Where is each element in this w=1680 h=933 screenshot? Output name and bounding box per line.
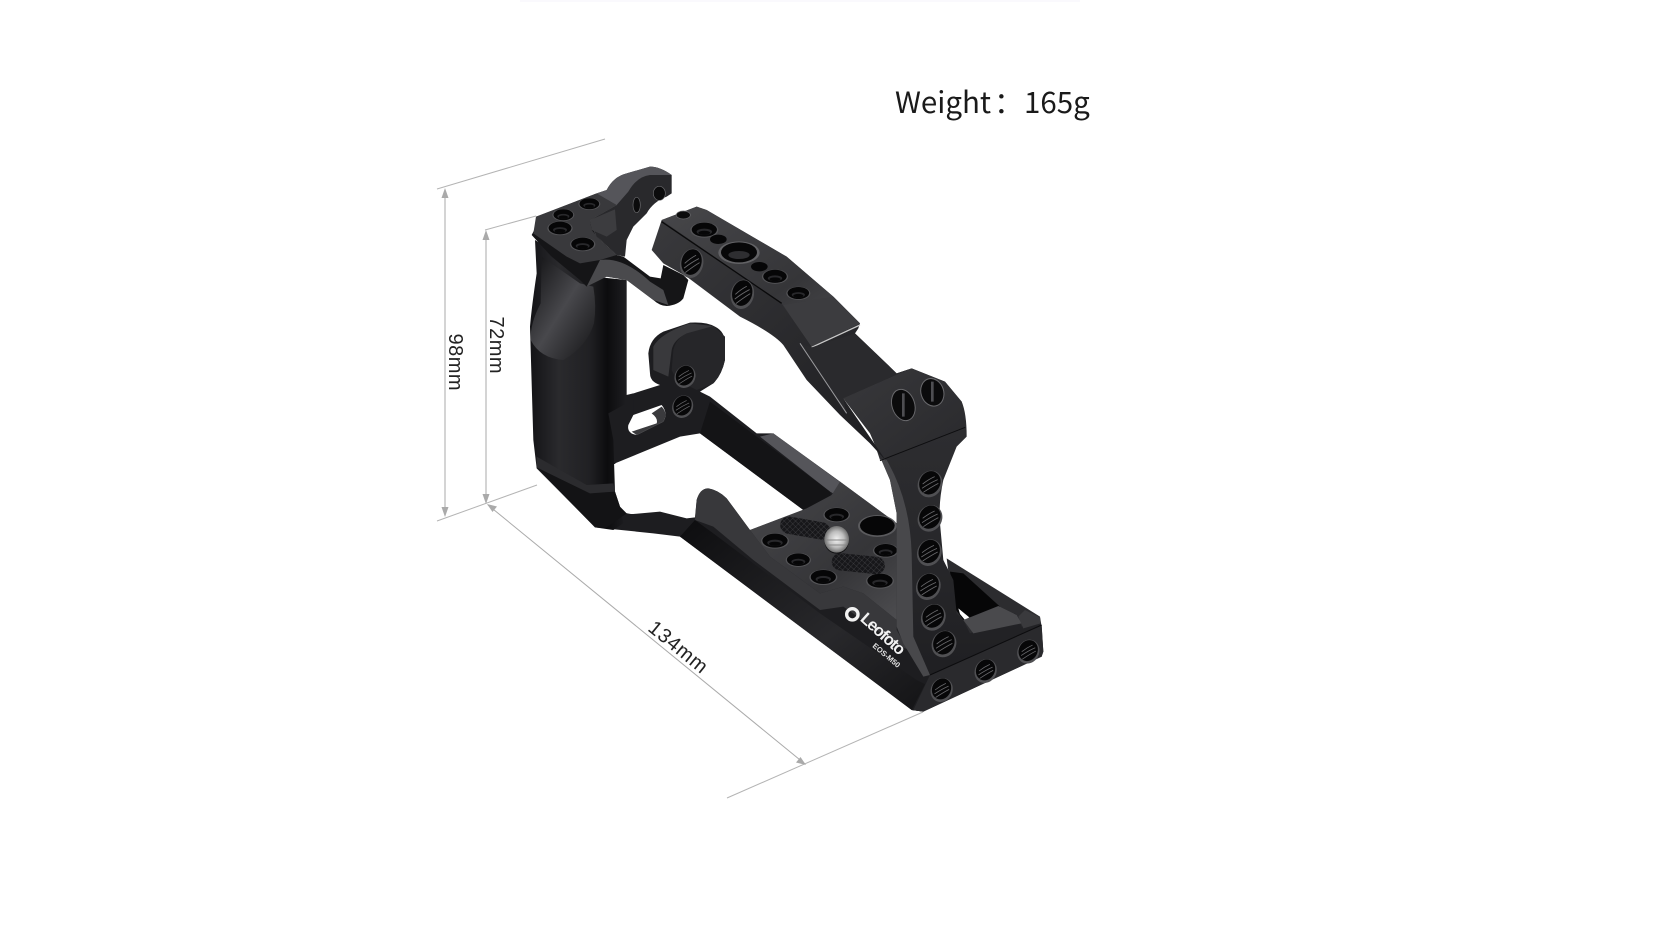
base side rail: [680, 520, 930, 712]
top grip plate with hook: [532, 167, 688, 306]
upper block: [843, 368, 965, 460]
foot face: [913, 625, 1043, 712]
logo: Leofoto branding: Leofoto: [857, 609, 909, 659]
mounting screw: [825, 530, 849, 554]
thumb rest: [531, 257, 595, 360]
anti-slip pads: [779, 515, 832, 541]
logo: Leofoto branding: [847, 609, 909, 670]
rail groove: [700, 402, 832, 510]
background glow at top edge: [520, 0, 1080, 2]
slot in rail: [628, 405, 665, 435]
dimension: height 72mm: 72mm: [485, 316, 507, 374]
dimension: height 98mm: 98mm: [444, 334, 466, 390]
front arm and foot: [843, 368, 1044, 712]
foot lip: [963, 606, 1022, 633]
product photo: camera cage: [530, 167, 1044, 712]
base plate top face: [680, 482, 930, 712]
dimension: height 72mm: [482, 216, 536, 504]
grip lower chamfer: [537, 467, 627, 527]
base plate, rail and knob: [595, 322, 930, 712]
base raised lip: [695, 488, 920, 653]
top bar with accessory holes: [652, 207, 912, 462]
heading: weight: Weight: [895, 80, 991, 122]
grip body: [530, 240, 627, 530]
heading: weight: 165g: [1024, 80, 1090, 122]
arm inner edge highlight: [880, 457, 930, 677]
heading: weight: ：: [994, 80, 1024, 122]
knob face: [672, 326, 725, 390]
dimension: length 134mm: 134mm: [644, 617, 712, 678]
dimension: height 98mm: [437, 139, 605, 521]
rear foot behind the arm: [947, 558, 1042, 640]
logo: Leofoto branding: EOS-M50: [871, 641, 902, 670]
rail upper face: [760, 433, 897, 523]
dimension: length 134mm: [487, 504, 923, 798]
